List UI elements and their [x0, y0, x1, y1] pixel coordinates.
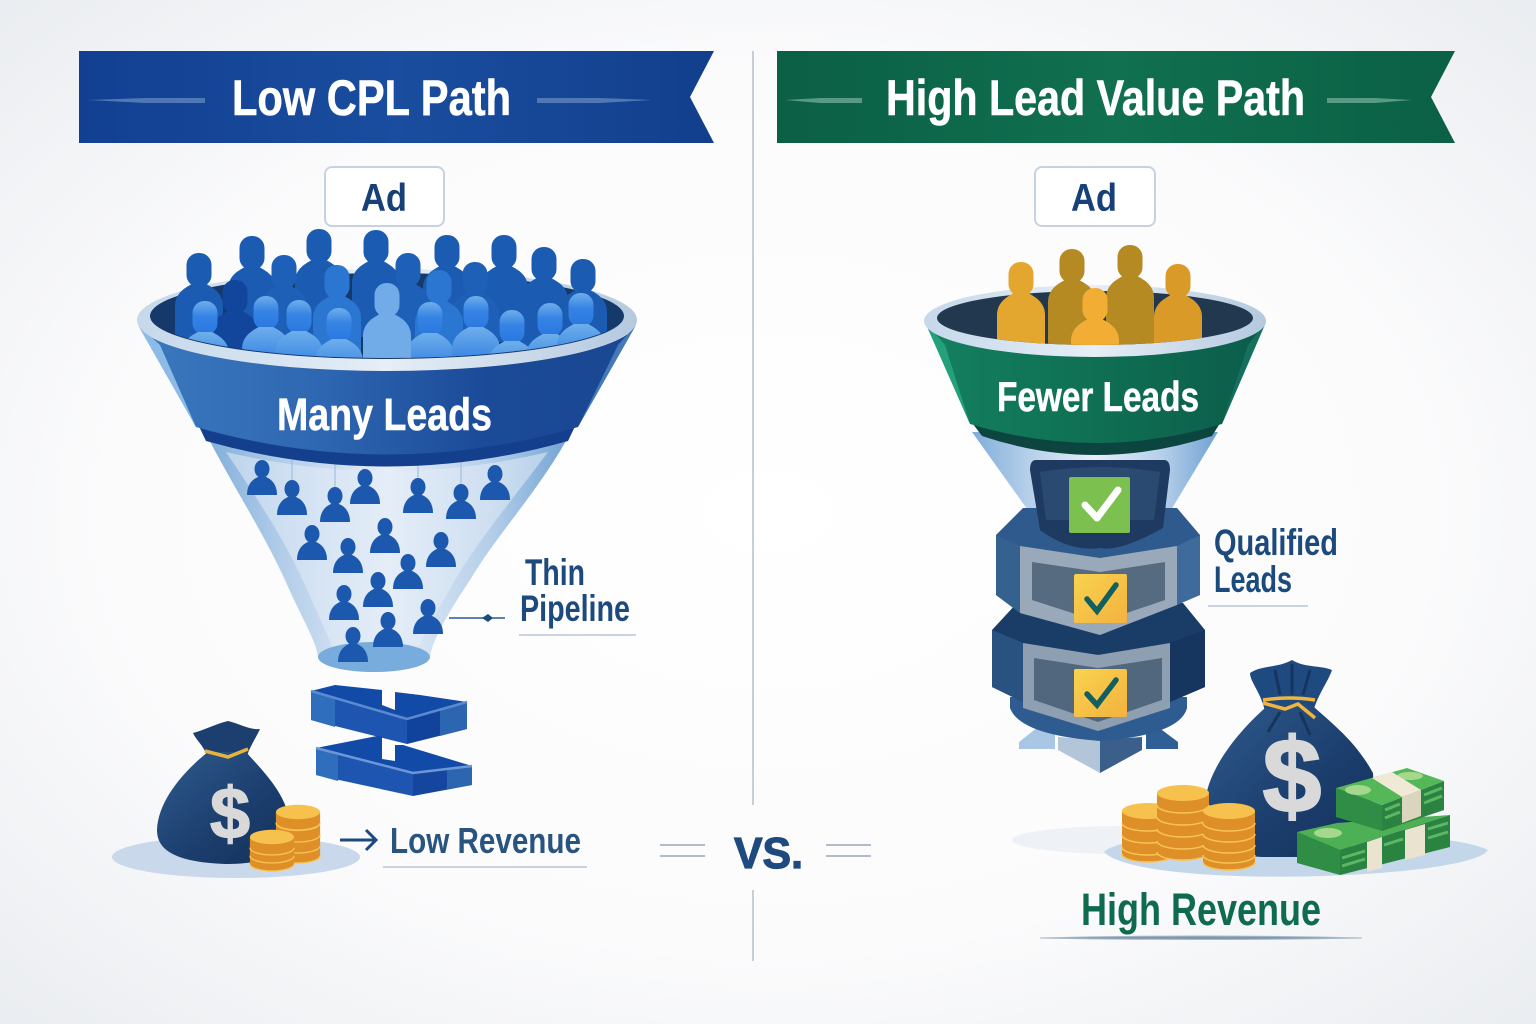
- coins large: [1122, 785, 1255, 870]
- broken pipe: [311, 685, 472, 796]
- banner: High Lead Value Path: [777, 51, 1455, 143]
- top green check module: [1030, 460, 1170, 549]
- shadow: [112, 836, 360, 878]
- callout: Qualified Leads: Qualified: [1214, 522, 1338, 563]
- funnel glass top: [972, 432, 1218, 520]
- callout: Qualified Leads: [1208, 522, 1338, 606]
- high revenue money: [1012, 660, 1488, 877]
- callout: Thin Pipeline: Thin: [525, 552, 585, 593]
- funnel: many leads: [137, 229, 637, 672]
- arrow and label: Low Revenue: Low Revenue: [390, 820, 581, 861]
- money bag large: [1205, 660, 1373, 857]
- money bag large: $: [1263, 717, 1321, 835]
- money bag small: [157, 721, 290, 864]
- section 2: [992, 603, 1205, 731]
- label: Fewer Leads: Fewer Leads: [997, 373, 1199, 420]
- banner: High Lead Value Path: High Lead Value Path: [886, 70, 1305, 126]
- funnel side highlights: [138, 325, 636, 427]
- ad box left: [325, 167, 444, 226]
- callout: Qualified Leads: Leads: [1214, 559, 1292, 600]
- vs label: VS.: [734, 829, 803, 878]
- funnel glass stem: [204, 430, 572, 672]
- funnel rim: [924, 285, 1266, 357]
- cash stacks: [1297, 768, 1450, 875]
- label: High Revenue: High Revenue: [1081, 884, 1321, 935]
- label: Many Leads: Many Leads: [277, 389, 492, 440]
- feet: [1019, 727, 1178, 773]
- callout: Thin Pipeline: [449, 552, 636, 635]
- funnel band: [970, 420, 1222, 455]
- callout: Thin Pipeline: Pipeline: [520, 588, 630, 629]
- falling leads: [247, 460, 510, 662]
- low revenue money: [112, 721, 360, 878]
- banner: Low CPL Path: Low CPL Path: [232, 70, 511, 126]
- funnel side highlights: [925, 322, 1266, 424]
- arrow and label: Low Revenue: [340, 820, 587, 867]
- coins small: [250, 805, 320, 871]
- funnel: fewer leads: [924, 245, 1266, 520]
- money bag small: $: [210, 774, 250, 854]
- funnel band: [196, 420, 578, 466]
- banner: Low CPL Path: [79, 51, 714, 143]
- qualification stack: [992, 460, 1205, 773]
- section 1: [996, 508, 1200, 635]
- ad box left: Ad: [361, 177, 407, 220]
- base bowl: [1010, 697, 1187, 741]
- ad box right: [1035, 167, 1155, 226]
- center divider: [752, 51, 754, 961]
- qualified crowd: [997, 245, 1202, 345]
- funnel rim: [137, 269, 637, 371]
- ad box right: Ad: [1071, 177, 1117, 220]
- crowd of leads: [175, 229, 607, 358]
- shadow: [1012, 826, 1488, 877]
